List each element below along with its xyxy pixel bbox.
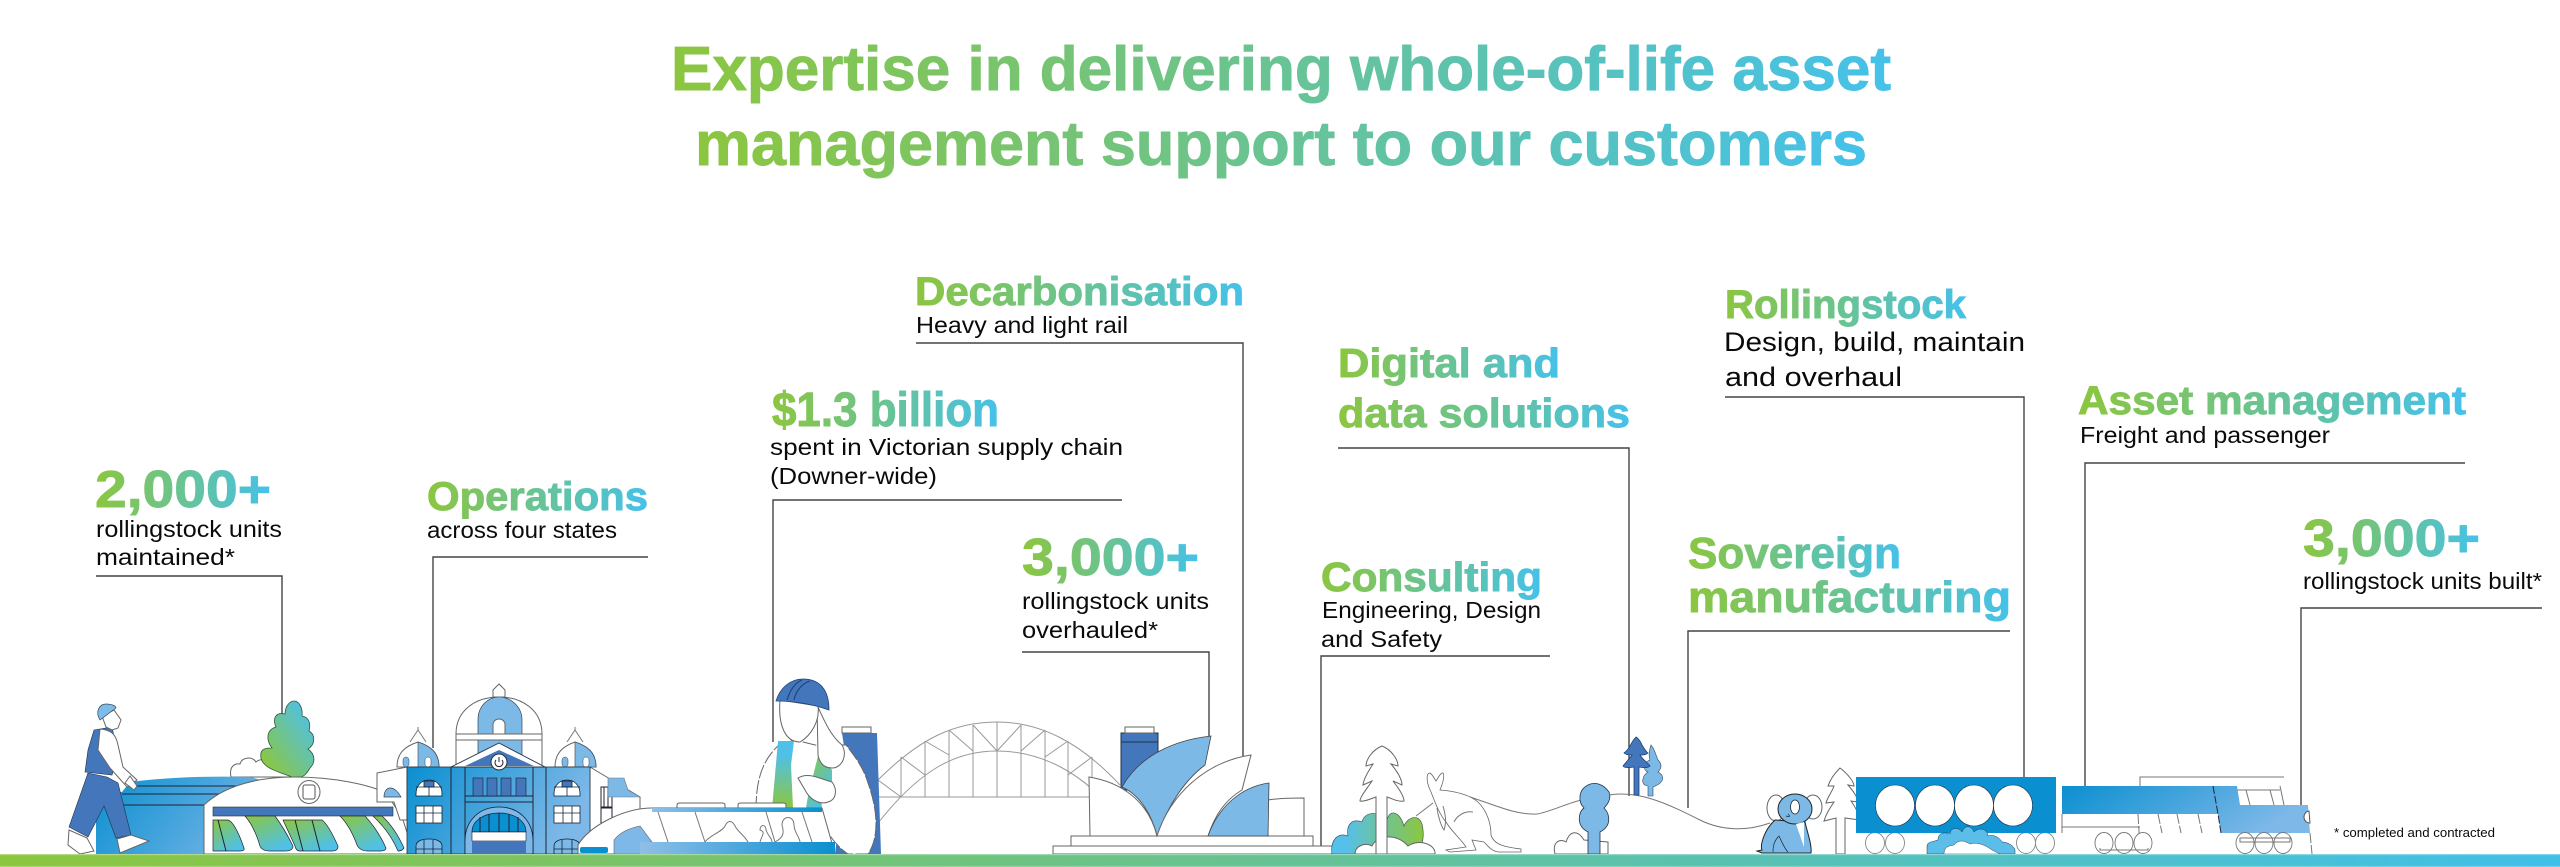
hard hat — [776, 679, 829, 710]
callout: $1.3 billion — [770, 384, 1123, 742]
callout: 3,000+ rollingstock units built — [2301, 510, 2542, 805]
side domes — [397, 727, 596, 767]
head — [102, 710, 121, 730]
callout: Sovereign manufacturing: Sovereign — [1688, 529, 1901, 578]
callout: Decarbonisation: Decarbonisation — [915, 270, 1244, 314]
callout: Asset management: Freight and passenger — [2080, 422, 2330, 448]
left wing — [377, 767, 407, 820]
main dome — [456, 684, 542, 767]
callout: $1.3 billion: spent in Victorian supply chain — [770, 434, 1123, 460]
station logo — [298, 780, 320, 804]
sails — [1268, 798, 1304, 836]
tram roof — [652, 808, 822, 812]
wagon bush — [1927, 827, 2015, 854]
facade — [407, 767, 590, 854]
right pylon — [1121, 733, 1158, 790]
illustration: tram and woman in hard hat — [578, 679, 881, 854]
callout: $1.3 billion: $1.3 billion — [772, 384, 999, 437]
roof outline and cab lines — [2140, 777, 2284, 805]
illustration: locomotive — [2062, 777, 2312, 854]
callout: Consulting: and Safety — [1321, 626, 1443, 652]
illustration: station and train — [96, 777, 414, 854]
tram lower stripe — [640, 842, 835, 854]
body — [756, 740, 876, 854]
face — [780, 700, 818, 742]
title: Expertise in delivering whole-of-life asset — [671, 35, 1891, 104]
hair — [817, 705, 844, 768]
left pylon — [835, 733, 881, 854]
callout: 3,000+ rollingstock units overhauled: 3,000+ — [1022, 529, 1199, 587]
shoes — [68, 830, 94, 854]
tie — [772, 741, 794, 808]
callout: Operations: across four states — [427, 517, 617, 543]
loco body — [2062, 786, 2310, 833]
blouse patch — [806, 752, 832, 808]
callout: Rollingstock: Design, build, maintain — [1724, 327, 2025, 357]
callout: Consulting: Engineering, Design — [1322, 597, 1541, 623]
illustration: opera house — [1053, 736, 1332, 854]
tram roof bumps — [677, 803, 786, 808]
title: management support to our customers — [695, 110, 1867, 179]
trousers — [69, 773, 131, 838]
tram body — [578, 808, 835, 854]
station white dome — [204, 777, 414, 854]
callout: 2,000+ rollingstock units maintained — [95, 461, 282, 714]
callout: Operations: Operations — [427, 475, 648, 519]
callout: Decarbonisation — [915, 270, 1244, 756]
callout: 2,000+ rollingstock units maintained: maintained* — [96, 544, 235, 570]
tram headlight — [580, 847, 608, 853]
wagon ellipses — [1876, 785, 2032, 826]
callout: 3,000+ rollingstock units overhauled: overhauled* — [1022, 617, 1158, 643]
main arch — [465, 807, 533, 854]
icon: twin trees on hill — [1623, 737, 1663, 796]
upper centre windows — [473, 778, 526, 796]
vest — [85, 727, 118, 775]
callout: Asset management: Asset management — [2078, 379, 2466, 423]
icon: gradient tree and bush — [231, 701, 314, 777]
station blue shed — [96, 777, 300, 854]
footnote: * completed and contracted — [2334, 825, 2495, 840]
icon: white tree by koala — [1824, 768, 1860, 854]
illustration: rail wagon — [1856, 777, 2056, 854]
callout: Digital and data solutions — [1338, 340, 1630, 796]
callout: Consulting: Consulting — [1321, 554, 1542, 600]
hard hat — [98, 704, 116, 720]
title — [671, 35, 1891, 179]
hand — [125, 776, 137, 790]
callout: $1.3 billion: (Downer-wide) — [770, 463, 937, 489]
steps — [1071, 836, 1313, 846]
callout: Decarbonisation: Heavy and light rail — [916, 312, 1128, 338]
loco wheels — [2095, 832, 2292, 854]
icon: worker walking — [68, 704, 149, 854]
icon: gradient bush with white tree — [1332, 746, 1435, 854]
callout: 3,000+ rollingstock units built: rollingstock units built* — [2303, 568, 2542, 594]
train windows — [213, 816, 404, 851]
side windows — [416, 780, 580, 854]
callout: Operations — [427, 475, 648, 748]
callout: Sovereign manufacturing — [1688, 529, 2011, 808]
pediment — [451, 743, 545, 770]
callout: Rollingstock: Rollingstock — [1725, 283, 1967, 327]
illustration: heritage railway station — [377, 684, 640, 854]
callout: Asset management — [2078, 379, 2466, 786]
tram front — [614, 826, 652, 854]
callout: Rollingstock — [1724, 283, 2025, 778]
callout: 3,000+ rollingstock units overhauled: rollingstock units — [1022, 588, 1209, 614]
callout: Rollingstock: and overhaul — [1725, 362, 1902, 392]
callout: Sovereign manufacturing: manufacturing — [1688, 573, 2011, 622]
callout: Digital and data solutions: Digital and — [1338, 340, 1560, 386]
callout: Consulting — [1321, 554, 1550, 847]
right wing — [590, 767, 640, 854]
ground band — [0, 854, 2560, 867]
callout: 3,000+ rollingstock units overhauled — [1022, 529, 1209, 740]
illustration: hill line — [1609, 794, 1770, 829]
illustration: harbour bridge — [878, 722, 1158, 823]
train top bar — [213, 807, 393, 816]
arm — [98, 729, 137, 787]
illustration: kangaroo and hills — [1416, 773, 1582, 852]
wagon wheels — [1866, 832, 2054, 854]
wagon body — [1856, 777, 2056, 833]
callout: 2,000+ rollingstock units maintained: rollingstock units — [96, 516, 282, 542]
hand — [798, 775, 835, 803]
callout: 3,000+ rollingstock units built: 3,000+ — [2303, 510, 2480, 568]
icon: koala — [1757, 794, 1822, 853]
callout: Digital and data solutions: data solutions — [1338, 390, 1630, 436]
tram passengers — [705, 818, 800, 842]
icon: blue tree with bush — [1554, 783, 1610, 854]
callout: 2,000+ rollingstock units maintained: 2,000+ — [95, 461, 271, 519]
